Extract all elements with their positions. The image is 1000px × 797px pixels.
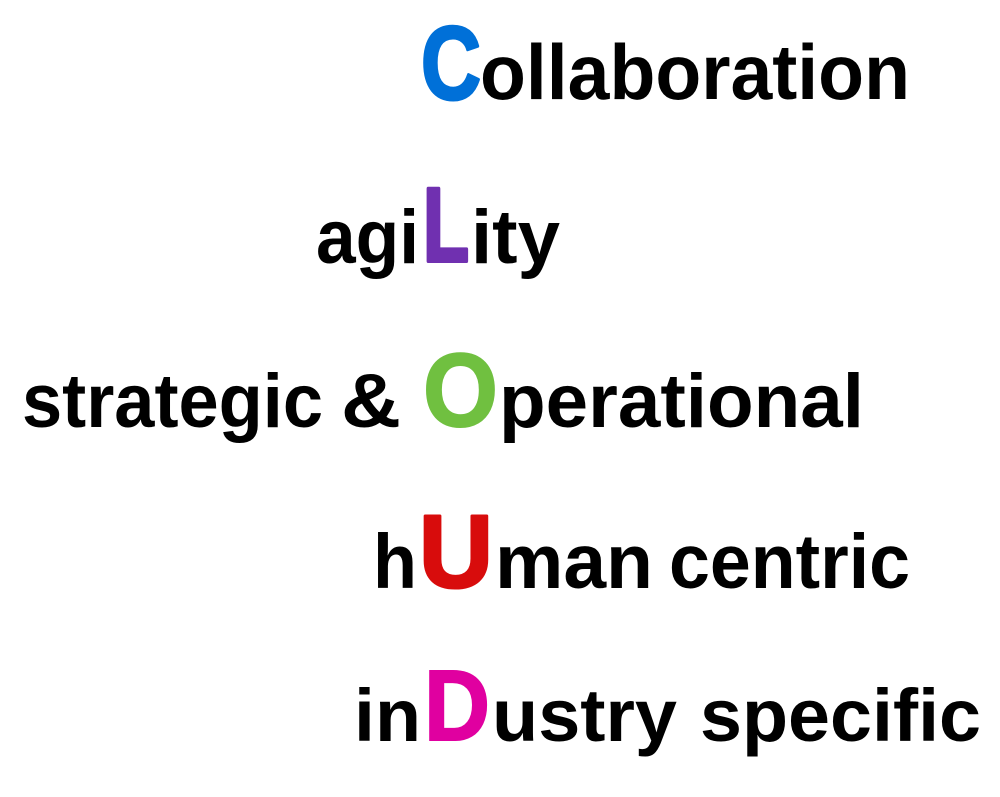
word remainder: perational: perational (499, 359, 864, 444)
word remainder: ollaboration: ollaboration (480, 28, 910, 116)
letter C: C (421, 6, 481, 122)
line: agiLity (316, 167, 560, 284)
word start: agi: agi (316, 195, 419, 280)
line: Collaboration (421, 6, 910, 122)
word remainder: man: man (495, 519, 653, 605)
word: strategic: strategic (22, 359, 323, 444)
line: hUman centric (373, 494, 910, 609)
word: specific: specific (700, 674, 981, 757)
letter D: D (424, 650, 490, 762)
ampersand: & (341, 359, 401, 444)
word end: ity: ity (471, 195, 560, 280)
line: strategic & Operational (22, 333, 864, 449)
letter U: U (419, 494, 493, 609)
letter L: L (423, 167, 469, 284)
word start: in: in (354, 674, 421, 757)
word: centric: centric (669, 519, 910, 605)
letter h: h (373, 519, 417, 605)
word end: ustry: ustry (492, 674, 677, 757)
letter O: O (423, 333, 498, 449)
line: inDustry specific (354, 650, 981, 762)
